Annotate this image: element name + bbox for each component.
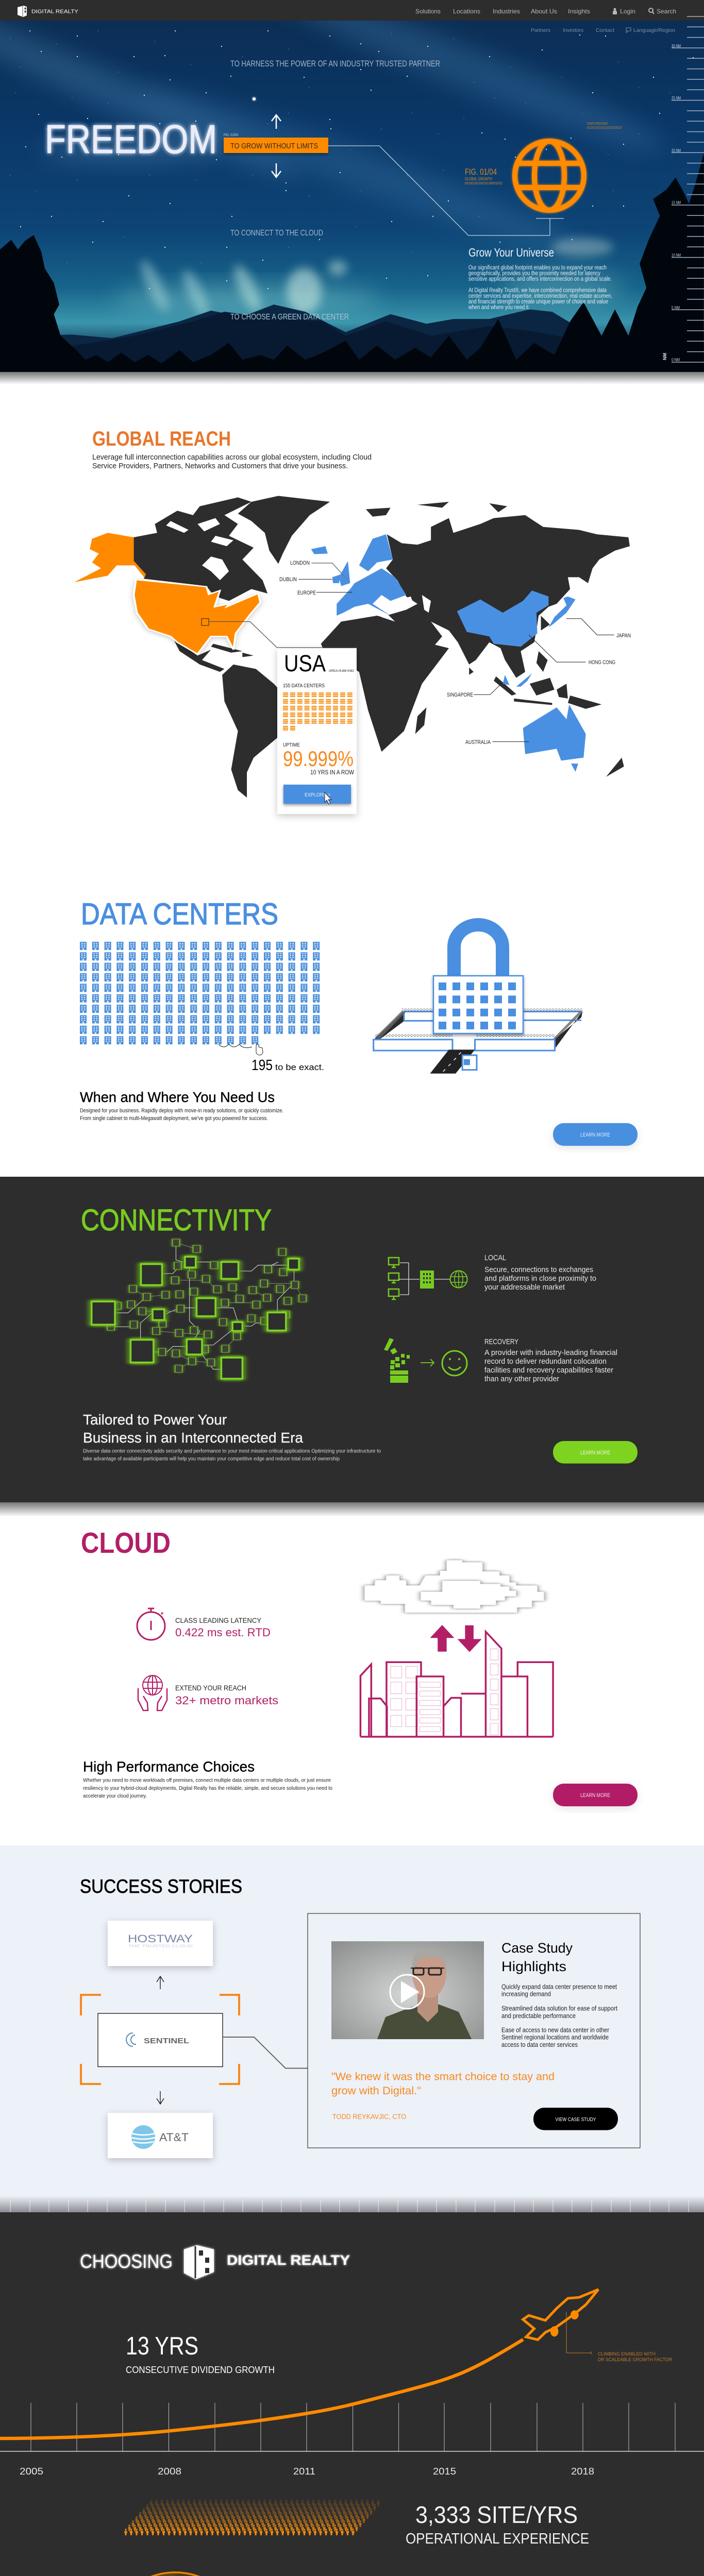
map location callouts	[202, 563, 614, 742]
stat: 13 yrs: CONSECUTIVE DIVIDEND GROWTH	[126, 2365, 275, 2375]
counting squiggle and hand cursor	[219, 1044, 263, 1055]
grow your universe text: sensitive applications, and offers interconnection on a global scale.	[468, 276, 612, 282]
case study title: Highlights	[501, 1959, 566, 1974]
heading: data centers: DATA CENTERS	[81, 897, 278, 931]
cloud body text: Whether you need to move workloads off premises, connect multiple data centers or multiple clouds, or just ensure	[83, 1777, 331, 1784]
latency stat: CLASS LEADING LATENCY	[175, 1616, 262, 1624]
local text: LOCAL	[484, 1253, 506, 1262]
growth timeline axis: 2015	[433, 2466, 456, 2477]
reach stat: EXTEND YOUR REACH	[175, 1684, 246, 1692]
nav menu: Login	[620, 8, 635, 15]
subheading: tailored: Tailored to Power Your	[83, 1412, 227, 1428]
dim caption: DIM=240X240	[587, 121, 608, 126]
explore button: EXPLORE >	[305, 792, 330, 798]
case study highlights: access to data center services	[501, 2041, 578, 2048]
nav menu: Locations	[453, 8, 480, 15]
case study title: Case Study	[501, 1940, 573, 1956]
up arrow	[272, 115, 281, 129]
world map	[74, 496, 630, 798]
growth timeline axis: 2005	[20, 2466, 43, 2477]
nav menu: Industries	[493, 8, 520, 15]
case study highlights: Sentinel regional locations and worldwide	[501, 2034, 609, 2041]
orange growth curve	[0, 2340, 523, 2438]
explore button	[283, 785, 351, 804]
quote: grow with Digital."	[331, 2085, 421, 2097]
global reach intro text: Leverage full interconnection capabilities across our global ecosystem, including Cloud	[92, 453, 372, 462]
dim caption	[587, 121, 622, 130]
grow your universe text: when and where you need it.	[468, 304, 530, 311]
case study highlights	[501, 1984, 617, 2048]
hero option: harness: TO HARNESS THE POWER OF AN INDUSTRY TRUSTED PARTNER	[230, 59, 440, 69]
quote: "We knew it was the smart choice to stay and	[331, 2071, 555, 2082]
orange selected option: TO GROW WITHOUT LIMITS	[230, 142, 318, 150]
grow your universe text: geographically, provides you the proximity needed for latency	[468, 270, 600, 277]
heading: choosing digital realty	[80, 2245, 350, 2279]
panel: success stories	[0, 1845, 704, 2212]
usa info card: 99.999%	[283, 747, 354, 771]
reach stat: 32+ metro markets	[175, 1694, 278, 1707]
button: learn more blue	[553, 1123, 638, 1146]
card: hostway	[108, 1921, 213, 1966]
illustration: pixel cloud	[364, 1560, 544, 1613]
nav menu: About Us	[531, 8, 557, 15]
heading: success stories: SUCCESS STORIES	[80, 1876, 242, 1897]
local text: your addressable market	[484, 1283, 565, 1292]
altitude scale: NM	[662, 353, 667, 360]
connectivity body text: take advantage of available participants will help you maintain your competitive edge and reduce total cost of ownership	[83, 1456, 340, 1462]
nav menu: Search	[657, 8, 676, 15]
map location labels: LONDON	[290, 560, 310, 566]
usa info card	[277, 648, 357, 814]
icon: rocket	[523, 2290, 598, 2340]
recovery text	[484, 1337, 617, 1383]
stat: 13 yrs	[126, 2332, 275, 2375]
padlock shackle	[454, 925, 502, 976]
down arrow	[272, 163, 281, 177]
map location labels: SINGAPORE	[447, 692, 473, 698]
card: sentinel selected: SENTINEL	[144, 2037, 189, 2045]
panel: connectivity	[0, 1177, 704, 1502]
usa info card: UPTIME	[283, 742, 300, 748]
heading: choosing digital realty: DIGITAL REALTY	[227, 2252, 350, 2268]
stat: 13 yrs: 13 YRS	[126, 2332, 198, 2360]
icon: orange globe	[515, 141, 584, 210]
nav bar	[0, 0, 704, 21]
subheading: high performance: High Performance Choices	[83, 1759, 255, 1774]
stat: site years	[406, 2501, 589, 2547]
case study title	[501, 1940, 573, 1974]
illustration: padlock data center	[374, 925, 583, 1074]
case study highlights: increasing demand	[501, 1991, 551, 1998]
altitude scale: 0 NM	[672, 358, 680, 362]
small fig label: FIG. 01/04	[224, 133, 238, 137]
server icons	[283, 692, 355, 731]
quote	[331, 2071, 555, 2097]
people grid	[123, 2500, 381, 2536]
connector line	[328, 146, 564, 235]
secondary nav: Language/Region	[633, 27, 675, 33]
card: sentinel selected	[98, 2013, 223, 2067]
secondary nav: Contact	[596, 27, 614, 33]
button: view case study: VIEW CASE STUDY	[556, 2116, 596, 2123]
case study highlights: Ease of access to new data center in other	[501, 2027, 609, 2034]
hero night sky background	[0, 0, 704, 372]
altitude scale: 20 NM	[672, 148, 681, 153]
hero panel: freedom	[0, 0, 704, 372]
figure caption: FIG. 01/04	[465, 167, 497, 177]
nav logo	[18, 6, 78, 17]
subheading: when and where: When and Where You Need Us	[80, 1089, 275, 1105]
case study highlights: and predictable performance	[501, 2012, 576, 2020]
grow your universe text: At Digital Realty Trust®, we have combined comprehensive data	[468, 287, 607, 294]
down arrow	[157, 2091, 164, 2104]
grow your universe text: Grow Your Universe	[468, 246, 554, 259]
card: hostway: HOSTWAY	[128, 1933, 193, 1945]
rocket callout: CLIMBING ENABLED WITH	[598, 2351, 656, 2357]
recovery text: than any other provider	[484, 1375, 559, 1383]
card: hostway: THE TRUSTED CLOUD	[128, 1943, 193, 1948]
usa info card: 10 YRS IN A ROW	[310, 770, 354, 776]
secondary nav	[531, 27, 675, 33]
hero option: green: TO CHOOSE A GREEN DATA CENTER	[230, 313, 349, 321]
recovery text: record to deliver redundant colocation	[484, 1358, 607, 1366]
recovery text: RECOVERY	[484, 1337, 518, 1346]
recovery icons	[384, 1338, 467, 1383]
heading: connectivity: CONNECTIVITY	[81, 1204, 272, 1237]
altitude scale	[662, 16, 704, 362]
stat: site years: 3,333 SITE/YRS	[415, 2501, 578, 2528]
latency stat: 0.422 ms est. RTD	[175, 1626, 271, 1639]
button: learn more green: LEARN MORE	[580, 1450, 610, 1456]
secondary nav: Partners	[531, 27, 550, 33]
altitude scale: 15 NM	[672, 200, 681, 205]
usa info card: USA	[284, 650, 326, 676]
dim caption: 01101010101101010010	[587, 125, 622, 130]
data centers body text: Designed for your business. Rapidly deploy with move-in ready solutions, or quickly customize.	[80, 1108, 283, 1114]
altitude scale: 25 NM	[672, 96, 681, 100]
connectivity body text: Diverse data center connectivity adds security and performance to your most mission-critical applications Optimizing your infrastructure to	[83, 1448, 381, 1454]
local text	[484, 1253, 596, 1292]
data centers body text: From single cabinet to multi-Megawatt deployment, we've got you powered for success.	[80, 1115, 268, 1122]
reach stat	[175, 1684, 278, 1707]
button: learn more green	[553, 1441, 638, 1464]
usa info card: 155 DATA CENTERS	[283, 683, 325, 689]
altitude scale: 30 NM	[672, 44, 681, 48]
grow your universe text	[468, 246, 612, 311]
cloud body text	[83, 1777, 332, 1799]
nav menu: Insights	[568, 8, 590, 15]
nav menu	[415, 8, 676, 15]
card: at&t	[108, 2113, 213, 2158]
cloud body text: resiliency to your hybrid-cloud deployments, Digital Realty has the reliable, simple, and secure solutions you need to	[83, 1785, 332, 1791]
case study highlights: Quickly expand data center presence to meet	[501, 1984, 617, 1991]
altitude scale: 10 NM	[672, 253, 681, 258]
panel: choosing digital realty	[0, 2212, 704, 2576]
up arrow	[157, 1976, 164, 1989]
panel: global reach	[74, 428, 631, 814]
local text: Secure, connections to exchanges	[484, 1266, 593, 1274]
map location labels: HONG CONG	[589, 659, 615, 666]
hero title: FREEDOM	[45, 116, 217, 162]
map location labels	[279, 560, 631, 745]
rocket callout	[566, 2312, 672, 2363]
quote attribution: TODD REYKAVJIC, CTO	[332, 2113, 406, 2121]
stat: site years: OPERATIONAL EXPERIENCE	[406, 2531, 589, 2547]
network diagram	[92, 1239, 306, 1379]
map location labels: EUROPE	[297, 590, 316, 596]
figure caption: GLOBAL GROWTH	[465, 177, 492, 181]
heading: choosing digital realty: CHOOSING	[80, 2251, 173, 2272]
building body	[433, 976, 523, 1033]
map location labels: AUSTRALIA	[465, 739, 491, 745]
grow your universe text: Our significant global footprint enables you to expand your reach	[468, 265, 607, 271]
recovery text: facilities and recovery capabilities faster	[484, 1366, 613, 1375]
icon: globe in hands	[138, 1675, 167, 1710]
radar chart	[150, 2571, 200, 2576]
panel: data centers	[80, 897, 638, 1146]
panel: cloud	[81, 1527, 638, 1806]
data centers body text	[80, 1108, 283, 1122]
grow your universe text: center services and expertise, interconnection, real estate acumen,	[468, 293, 612, 299]
growth timeline axis: 2018	[571, 2466, 594, 2477]
subheading: tailored: Business in an Interconnected Era	[83, 1430, 303, 1446]
icon: stopwatch	[137, 1608, 165, 1640]
195 building icon grid	[80, 942, 325, 1046]
recovery text: A provider with industry-leading financial	[484, 1349, 617, 1357]
hero mountains and trees	[0, 154, 704, 371]
connectivity body text	[83, 1448, 381, 1462]
hero option: cloud: TO CONNECT TO THE CLOUD	[230, 229, 323, 238]
photo: executive portrait	[331, 1941, 484, 2039]
case study highlights: Streamlined data solution for ease of support	[501, 2005, 617, 2012]
secondary nav: Investors	[563, 27, 583, 33]
orange selected option	[224, 138, 328, 153]
figure caption: 0010010010010100001001	[465, 181, 502, 185]
heading: global reach: GLOBAL REACH	[92, 428, 231, 450]
map location labels: JAPAN	[616, 633, 631, 639]
nav logo: DIGITAL REALTY	[31, 8, 78, 14]
card: at&t: AT&T	[159, 2131, 189, 2144]
usa info card: AREA=9.8M KM2	[329, 669, 354, 673]
global reach intro text: Service Providers, Partners, Networks and Customers that drive your business.	[92, 462, 348, 470]
illustration: city skyline	[360, 1632, 553, 1737]
button: view case study	[533, 2108, 618, 2130]
grow your universe text: and financial strength to create unique power of choice and value	[468, 299, 608, 305]
latency stat	[175, 1616, 271, 1639]
map location labels: DUBLIN	[279, 577, 297, 583]
case study panel	[308, 1913, 640, 2148]
growth timeline axis	[0, 2403, 704, 2477]
cloud body text: accelerate your cloud journey.	[83, 1793, 147, 1799]
illustration: up and down arrows	[430, 1625, 482, 1652]
rocket callout: DR SCALEABLE GROWTH FACTOR	[598, 2357, 672, 2363]
figure caption	[465, 167, 502, 185]
heading: cloud: CLOUD	[81, 1527, 171, 1560]
orange selection brackets	[81, 1995, 239, 2084]
195 to be exact: to be exact.	[275, 1062, 324, 1072]
subheading: tailored	[83, 1412, 303, 1446]
local text: and platforms in close proximity to	[484, 1275, 596, 1283]
nav menu: Solutions	[415, 8, 441, 15]
195 to be exact	[252, 1057, 324, 1074]
global reach intro text	[92, 453, 372, 470]
icon: play button	[390, 1975, 424, 2009]
altitude scale: 5 NM	[672, 306, 680, 310]
195 to be exact: 195	[252, 1057, 273, 1074]
local icons: monitors to building to globe	[389, 1258, 467, 1299]
fence and road	[374, 1006, 583, 1074]
connector line	[223, 2037, 308, 2068]
button: learn more blue: LEARN MORE	[580, 1132, 610, 1138]
button: learn more magenta	[553, 1784, 638, 1806]
growth timeline axis: 2011	[293, 2466, 315, 2477]
growth timeline axis: 2008	[158, 2466, 181, 2477]
button: learn more magenta: LEARN MORE	[580, 1792, 610, 1799]
